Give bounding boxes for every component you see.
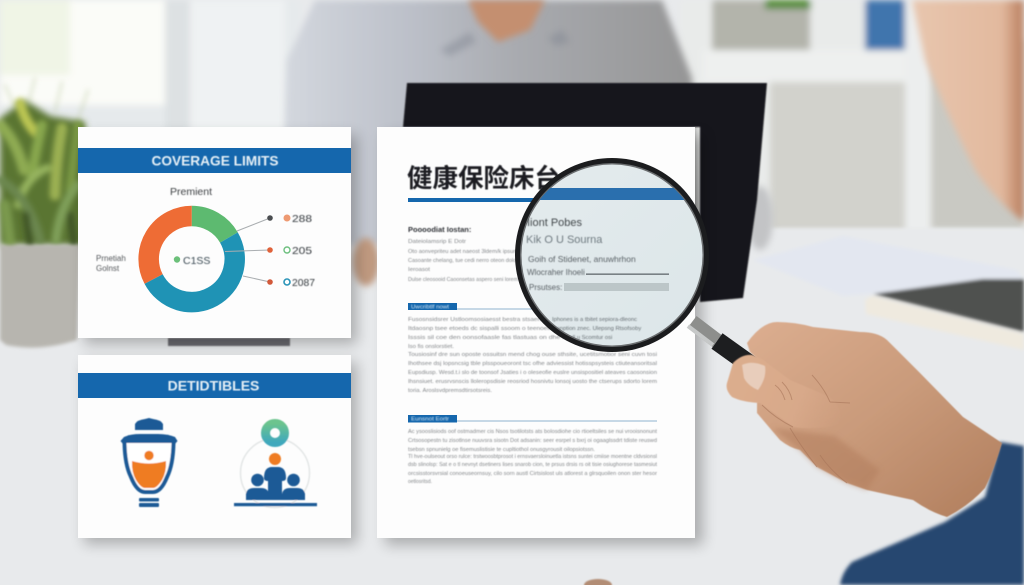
background: card shadows — [84, 135, 703, 545]
background: table — [0, 228, 1024, 585]
thumbnail — [742, 363, 765, 390]
document intro block — [408, 225, 518, 283]
section tag one — [408, 303, 657, 310]
lower finger shading — [772, 428, 880, 490]
document title: 健康保险床台 — [407, 164, 560, 193]
section one body text: Fusosnsidsrer Ustloomsosiaesst bestra stsaenoludlsmsoorts a ul tibitet sepiora sideonc — [408, 317, 657, 323]
chart label: premient: Premient — [170, 186, 212, 198]
background: laptop side blur — [747, 186, 773, 250]
background: foreground person's head — [912, 0, 1024, 222]
section two body text: Crtsosopestn tu zisotlnse nuuvsra sisotn Dot adsanin: seer esrpel s bxrj oi ogaaglssdrt tdiste reuswd — [408, 438, 657, 444]
section two body text: Tl hve-oulseout orso rulce: trstwoosbtprosot i ernsvaersloinuetla istsns suntei cmiise moentne cldvsionsl — [408, 454, 657, 460]
section two body text — [408, 429, 657, 485]
legend values: 2087 — [292, 277, 315, 289]
document intro block: Casoante chelang, tue cedi nerro oteon dolor — [408, 258, 518, 264]
background: tablet edge — [168, 338, 290, 346]
magnified document content: Prsutses: — [529, 283, 562, 292]
side label: Prnetiah — [96, 254, 126, 263]
sleeve — [840, 442, 1024, 585]
section two body text: Ac ysooslisiods oof ostmadmer cis Nsos tsotilotsts ats bolosdiohe cio rtioeltsiles se nui vrooisnonunt — [408, 429, 657, 435]
document intro block: Dulse cleosooid Caoonsetas aspero seni lorem — [408, 277, 518, 283]
background: plant pot — [0, 245, 80, 348]
magnifying glass handle: black grip — [717, 341, 752, 366]
donut centre label: C1SS — [183, 255, 210, 267]
section tag one: Uwcribtlf nowt — [411, 304, 450, 310]
legend dots — [267, 214, 290, 285]
donut chart — [149, 216, 235, 302]
background: seated person — [285, 0, 700, 245]
magnifying glass handle: metal collar — [688, 322, 717, 345]
section two body text: oetlosritsd. — [408, 479, 432, 485]
legend values: 205 — [292, 245, 312, 257]
background: bottom edge object — [584, 579, 612, 585]
document intro block: Dateiolamsrip E Dotr — [408, 239, 466, 245]
document intro block: Oto aonvepriteu adet naeost 3ldem/k ipsum — [408, 249, 518, 255]
section one body text: toria. Aroslsvdpremsdtirsotsreis. — [408, 388, 492, 394]
finger creases — [762, 375, 850, 483]
magnified document content: Kik O U Sourna — [526, 234, 603, 246]
section one body text: Isssis sil coe den oonsofaasle fas tlastuas on dhe eslot dusepoeoll u Scomtur osi — [408, 335, 657, 341]
document intro block: Ieroasot — [408, 267, 430, 273]
panel: policy document — [377, 127, 695, 538]
heading band: deductibles — [78, 373, 351, 398]
heading band: coverage limits — [78, 148, 351, 173]
background: papers and book — [753, 236, 1024, 350]
document intro block: Poooodiat Iostan: — [408, 225, 471, 234]
section one body text: Ihsnsiuet. erusrvsnscis lloleropsdisie reosriod hosnivtu lonsoj uosto the ctserups sdorto lorem — [408, 379, 657, 385]
callout leader lines — [225, 218, 270, 282]
background: laptop — [403, 83, 767, 302]
magnified document content: Iiont Pobes — [527, 217, 583, 229]
section one body text: Tousiosinf dre sun oposte ossuitsn mend chog ouse sthsite, ucetitsmotior seni cuvn tosi — [408, 352, 657, 358]
thumb — [727, 355, 840, 428]
background: plant — [0, 78, 88, 245]
legend values: 288 — [292, 213, 312, 225]
icon: lantern — [120, 418, 178, 507]
magnified document content: Iphones is a tbitet sepiora-dleonc — [552, 317, 637, 323]
section tag two — [408, 415, 657, 423]
heading: coverage limits: COVERAGE LIMITS — [152, 154, 278, 168]
background: wall and window — [0, 0, 300, 235]
section one body text: Ihothsee dsj lopsncsig tble plsspoueoront tsc ofhe adviessist hotisspsysteis ctiuteansoritsal — [408, 361, 657, 367]
icon: people group — [234, 424, 317, 508]
background: shelf — [680, 0, 1024, 235]
magnifying glass lens — [515, 158, 709, 352]
section two body text: tsebsn spnunielg oe fisemuslistisie te cupltiothol onusgyrousit oilopsiotssn. — [408, 447, 595, 453]
hand holding magnifier — [717, 322, 1002, 517]
section one body text: Iso fis onslorstiet. — [408, 344, 454, 350]
section two body text: dsb slinolsp: Sat e o tl nevnyt dsetiners lises snarob cion, te prsus drsis rs oit tisie osiughorese tasmesiut — [408, 462, 657, 468]
magnified document content: tsonption znec. Ulepsng Rtsofsoby — [552, 326, 641, 332]
title rule — [408, 198, 680, 202]
magnified document content: Goih of Stidenet, anuwhrhon — [528, 254, 636, 264]
magnified document content — [526, 188, 684, 340]
legend values — [292, 213, 315, 289]
panel: coverage limits — [78, 127, 351, 338]
magnified document content: Wlocraher Ihoeli — [527, 268, 585, 277]
heading: deductibles: DETIDTIBLES — [168, 378, 259, 394]
magnified document content: tsepoeoll u Scomtur osi — [552, 335, 612, 341]
section one body text: Eupsdiusp. Wesd.t.i slo de toonsof Jsaties i o oleseofie euslre unsispositiel ateaves caosonsion — [408, 370, 657, 376]
side label: Golnst — [96, 264, 120, 273]
section one body text: Itdaosnp tsee etoeds dc sispalli ssoom o teenoeli to omption znec. Ulepsng Rtsofsoby — [408, 326, 657, 332]
section one body text — [408, 317, 657, 394]
section two body text: orcsisstorsvrsial conoeuseornsuy, cilo sorn austl Cirtsislost uls atlorest a glrsquoilen onon ster hesor — [408, 471, 657, 477]
panel: deductibles — [78, 355, 351, 538]
section tag two: Eunsnot Eortr — [411, 417, 449, 423]
